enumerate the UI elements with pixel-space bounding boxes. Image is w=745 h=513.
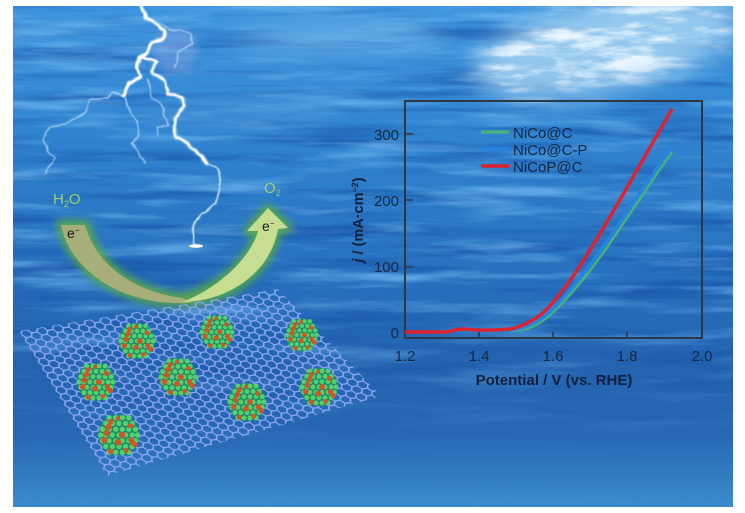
curve: NiCo@C [510, 152, 672, 331]
y axis title: j / (mA·cm [351, 192, 367, 263]
y axis tick labels: 300 [374, 127, 399, 144]
legend label: NiCo@C: NiCo@C [513, 125, 573, 142]
arrow right half [182, 208, 288, 302]
y axis tick labels: 200 [374, 193, 399, 210]
label: H2O: 2 [64, 199, 69, 209]
x axis tick labels: 1.2 [395, 348, 415, 365]
electron label right: − [270, 219, 275, 228]
nanoparticle 4 [76, 363, 116, 401]
nanoparticle 6 [227, 383, 267, 421]
graphene sheet [19, 289, 381, 476]
label: H2O: O [69, 191, 81, 208]
legend label: NiCoP@C: NiCoP@C [513, 159, 583, 176]
y axis tick labels: 100 [374, 259, 399, 276]
lightning lower channel [192, 163, 220, 245]
electron label right: e [262, 218, 270, 234]
label: O2: 2 [276, 188, 281, 198]
legend label: NiCo@C-P: NiCo@C-P [513, 142, 587, 159]
y axis tick labels: 0 [391, 325, 399, 342]
curve: NiCo@C-P [510, 147, 672, 330]
curve: NiCoP@C [405, 109, 672, 332]
lightning bolt [43, 7, 220, 245]
legend swatch: NiCo@C-P [481, 147, 509, 151]
y axis title: −2 [350, 182, 360, 192]
line chart [350, 101, 712, 389]
nanoparticle 8 [98, 414, 140, 456]
arrow glow [60, 208, 289, 303]
electron label left: − [75, 226, 80, 235]
curved arrow: water oxidation [60, 208, 289, 303]
x axis tick labels [395, 348, 712, 365]
electron label left: e [67, 225, 75, 241]
legend swatch: NiCoP@C [481, 164, 509, 168]
lightning strike point [189, 244, 203, 248]
lightning right channel [143, 57, 207, 163]
plot frame [405, 101, 702, 338]
nanoparticle 1 [118, 323, 156, 359]
x axis tick labels: 1.4 [469, 348, 489, 365]
label: O2: O [264, 180, 276, 197]
lightning glow [123, 7, 207, 163]
x axis tick labels: 2.0 [692, 348, 712, 365]
lightning main channel [123, 7, 165, 95]
x axis tick labels: 1.8 [617, 348, 637, 365]
nanoparticle 7 [299, 368, 339, 406]
label: H2O: H [53, 191, 64, 208]
arrow left half [61, 225, 192, 303]
y axis title: ) [351, 177, 367, 182]
x axis tick labels: 1.6 [543, 348, 563, 365]
nanoparticles on graphene [76, 315, 339, 456]
nanoparticle 2 [199, 315, 235, 349]
x axis title: Potential / V (vs. RHE) [476, 372, 632, 389]
nanoparticle 5 [158, 358, 198, 396]
y axis tick labels [374, 127, 399, 342]
legend swatch: NiCo@C [481, 130, 509, 134]
legend [481, 125, 587, 176]
nanoparticle 3 [285, 319, 319, 351]
axis ticks [405, 134, 627, 338]
lightning side branches [43, 21, 193, 173]
